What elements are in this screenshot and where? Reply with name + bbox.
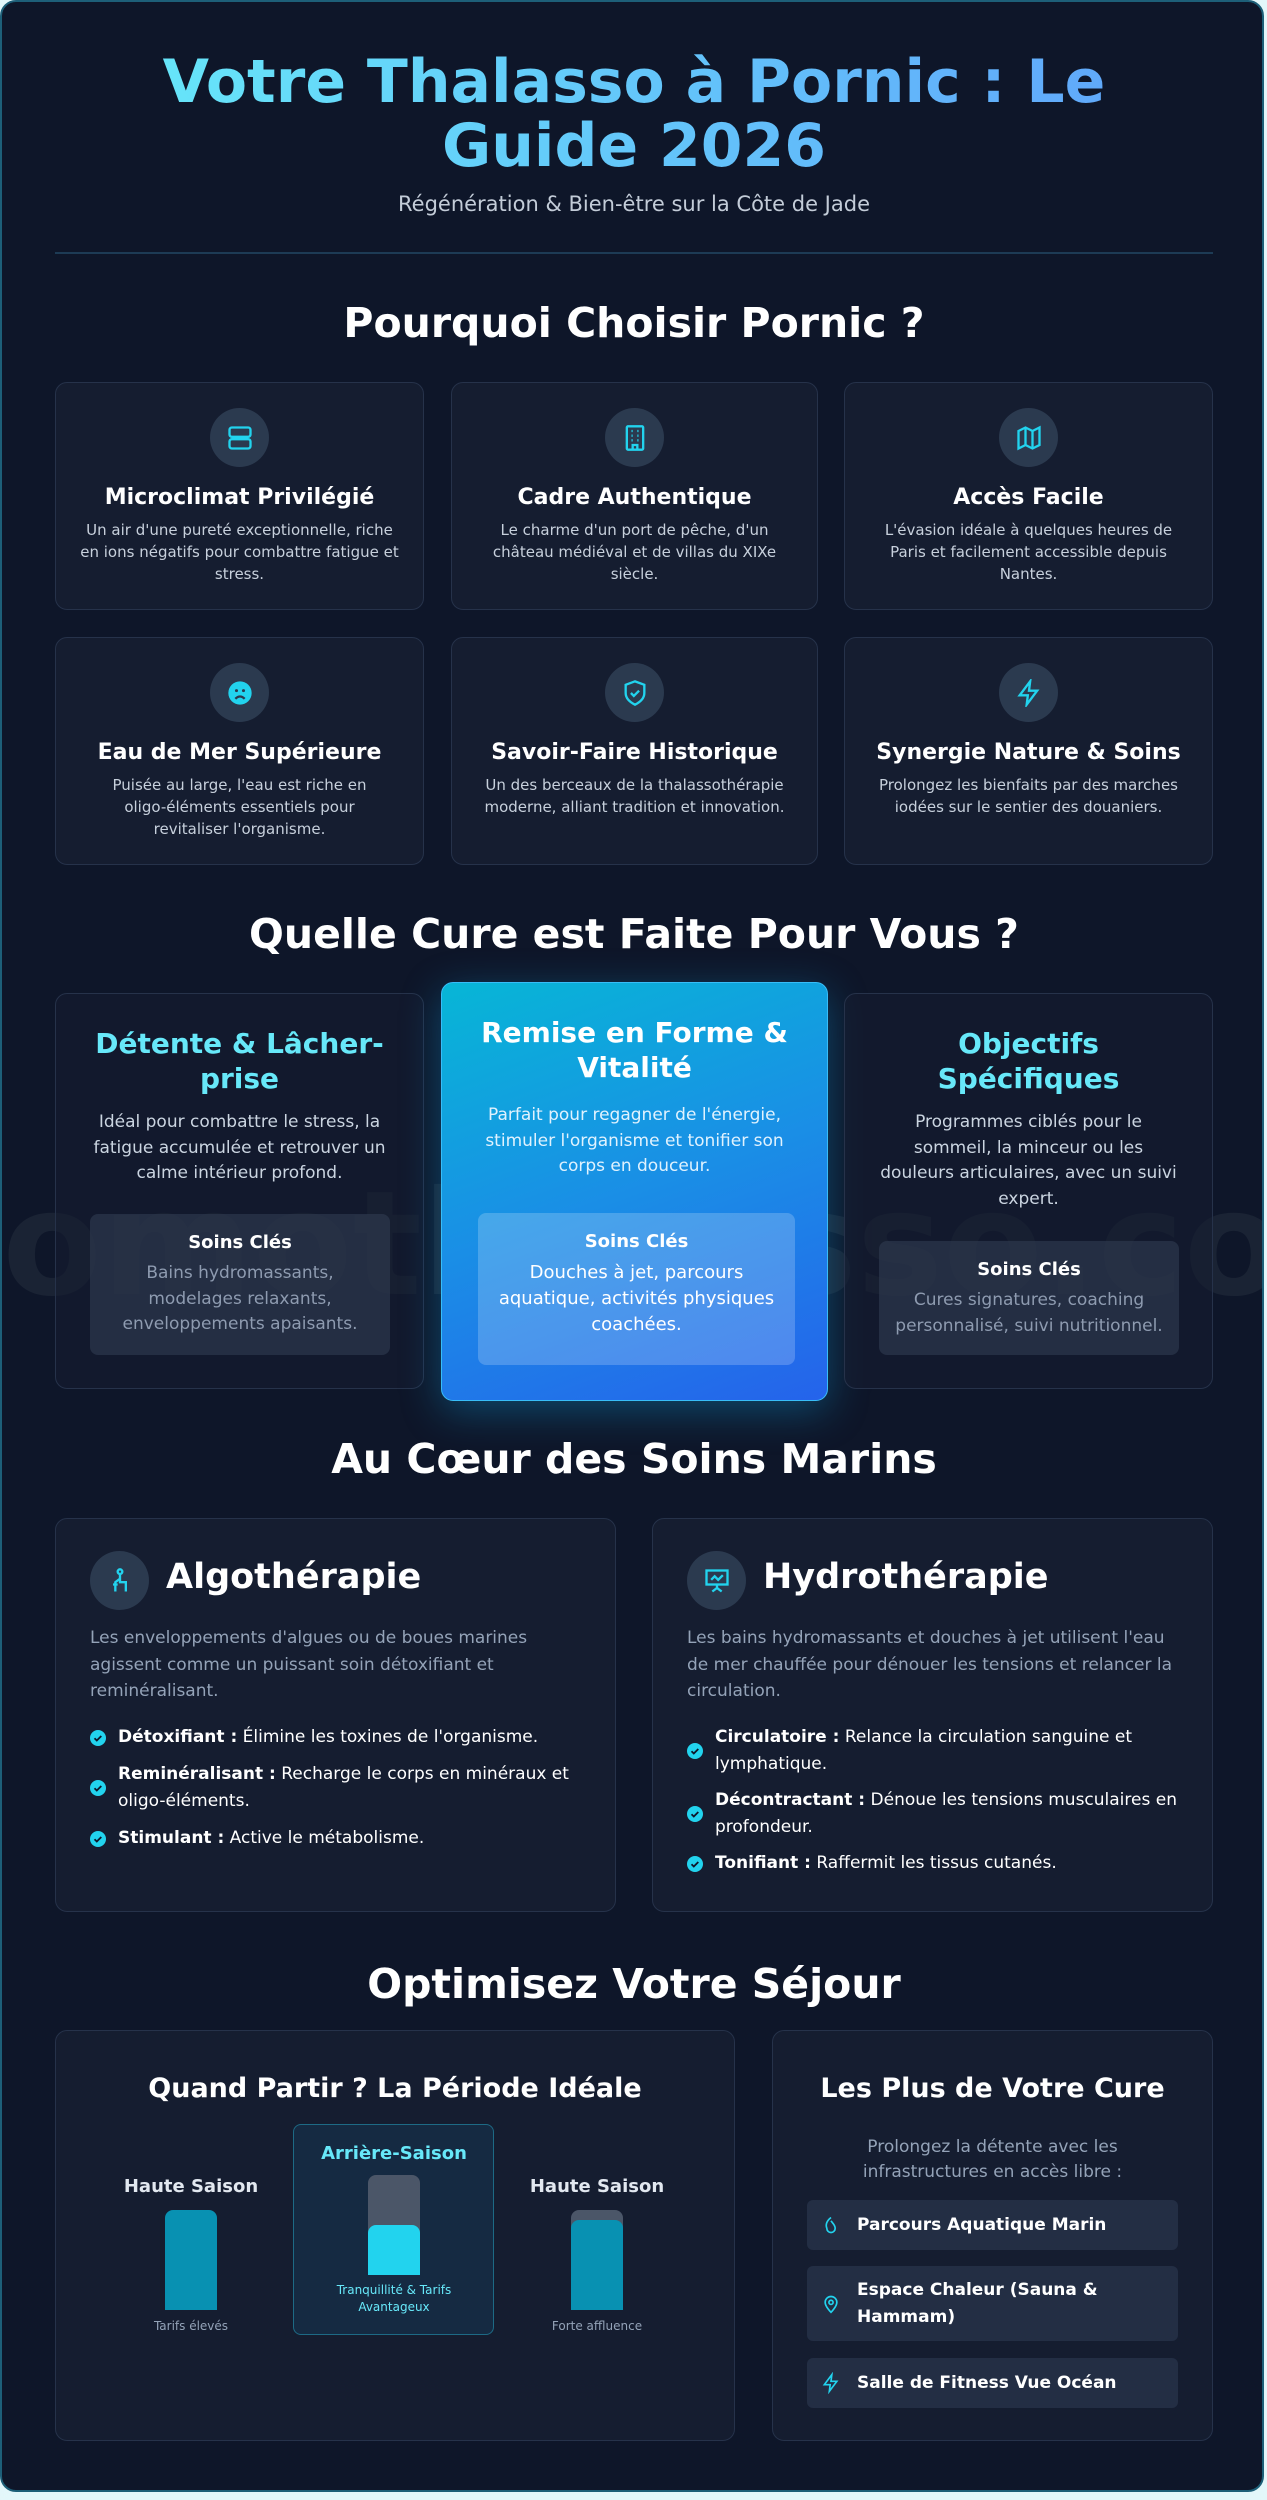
card: acces: Accès Facile xyxy=(953,485,1104,510)
panel: hydrotherapie: Les bains hydromassants et douches à jet utilisent l'eau de mer chauffée pour dénouer les tensions et relancer la circulation. xyxy=(687,1628,1172,1701)
card: microclimat: Un air d'une pureté exceptionnelle, riche en ions négatifs pour combattre fatigue et stress. xyxy=(80,521,399,583)
panel: les plus: Prolongez la détente avec les infrastructures en accès libre : xyxy=(863,2137,1122,2182)
soins cles box: Soins Clés xyxy=(188,1232,292,1253)
icon: map xyxy=(999,408,1058,467)
icon: chart board xyxy=(687,1551,746,1610)
bullet list: Stimulant : Active le métabolisme. xyxy=(118,1828,424,1848)
panel: les plus: Les Plus de Votre Cure xyxy=(820,2073,1165,2104)
panel: hydrotherapie xyxy=(652,1518,1213,1912)
cure card: detente xyxy=(55,993,424,1389)
item: fitness xyxy=(807,2358,1178,2408)
bar: arriere saison highlighted: Tranquillité & Tarifs xyxy=(337,2283,451,2297)
bar: arriere saison highlighted: Avantageux xyxy=(358,2300,430,2314)
cure card: detente: Détente & Lâcher-prise xyxy=(95,1027,384,1095)
panel: quand partir xyxy=(55,2030,735,2441)
card: cadre: Cadre Authentique xyxy=(517,485,752,510)
bar: arriere saison highlighted: Arrière-Saison xyxy=(321,2143,467,2164)
heading: soins marins: Au Cœur des Soins Marins xyxy=(331,1435,937,1483)
soins cles box: Cures signatures, coaching personnalisé, suivi nutritionnel. xyxy=(895,1290,1163,1336)
bar: haute saison 2 xyxy=(530,2176,664,2333)
card: eau de mer xyxy=(55,637,424,865)
heading: quelle cure: Quelle Cure est Faite Pour Vous ? xyxy=(249,910,1019,958)
bar: haute saison 1: Tarifs élevés xyxy=(154,2319,228,2333)
card: eau de mer: Puisée au large, l'eau est riche en oligo-éléments essentiels pour revitaliser l'organisme. xyxy=(112,776,366,838)
panel: algotherapie: Algothérapie xyxy=(166,1557,421,1597)
cure card: objectifs xyxy=(844,993,1213,1389)
card: savoir-faire: Savoir-Faire Historique xyxy=(491,740,778,765)
title: Votre Thalasso à Pornic : Le Guide 2026 xyxy=(163,47,1105,181)
soins cles box xyxy=(879,1241,1179,1355)
soins cles box: Douches à jet, parcours aquatique, activités physiques coachées. xyxy=(499,1262,774,1335)
icon: building xyxy=(605,408,664,467)
bar chart: saisons xyxy=(124,2124,664,2335)
item: espace chaleur: Hammam) xyxy=(857,2306,955,2326)
card: cadre: Le charme d'un port de pêche, d'un château médiéval et de villas du XIXe siècle. xyxy=(493,521,776,583)
bar: haute saison 1: Haute Saison xyxy=(124,2176,258,2197)
bar: haute saison 1 xyxy=(124,2176,258,2333)
cure card: remise en forme (highlight) xyxy=(441,982,828,1401)
item: espace chaleur xyxy=(807,2266,1178,2341)
bullet list: Détoxifiant : Élimine les toxines de l'organisme. xyxy=(118,1727,538,1747)
panel: algotherapie xyxy=(55,1518,616,1912)
heading: optimisez: Optimisez Votre Séjour xyxy=(367,1960,901,2008)
bar: haute saison 2: Haute Saison xyxy=(530,2176,664,2197)
soins cles box: Bains hydromassants, modelages relaxants, enveloppements apaisants. xyxy=(123,1263,357,1334)
icon: person xyxy=(90,1551,149,1610)
card: synergie xyxy=(844,637,1213,865)
item: parcours aquatique: Parcours Aquatique Marin xyxy=(857,2214,1106,2234)
bullet list xyxy=(90,1726,569,1848)
panel: quand partir: Quand Partir ? La Période Idéale xyxy=(148,2073,642,2104)
bullet list: Tonifiant : Raffermit les tissus cutanés. xyxy=(715,1853,1057,1873)
bullet list xyxy=(687,1727,1177,1873)
item: parcours aquatique xyxy=(807,2200,1178,2250)
card: eau de mer: Eau de Mer Supérieure xyxy=(98,740,381,765)
card: savoir-faire: Un des berceaux de la thalassothérapie moderne, alliant tradition et innovation. xyxy=(484,776,784,816)
bar: arriere saison highlighted xyxy=(293,2124,494,2335)
subtitle: Régénération & Bien-être sur la Côte de Jade xyxy=(398,192,870,216)
bullet list: Reminéralisant : Recharge le corps en minéraux et oligo-éléments. xyxy=(118,1764,569,1811)
bar: haute saison 2: Forte affluence xyxy=(552,2319,642,2333)
panel: hydrotherapie: Hydrothérapie xyxy=(763,1557,1049,1597)
cure card: remise en forme (highlight): Parfait pour regagner de l'énergie, stimuler l'organisme et tonifier son corps en douceur. xyxy=(485,1105,784,1176)
heading: pourquoi: Pourquoi Choisir Pornic ? xyxy=(343,299,925,347)
card: acces: L'évasion idéale à quelques heures de Paris et facilement accessible depuis Nantes. xyxy=(885,521,1172,583)
cure card: objectifs: Programmes ciblés pour le sommeil, la minceur ou les douleurs articulaires, avec un suivi expert. xyxy=(880,1112,1177,1208)
item: espace chaleur: Espace Chaleur (Sauna & xyxy=(857,2280,1098,2300)
bullet list: Décontractant : Dénoue les tensions musculaires en profondeur. xyxy=(715,1790,1177,1837)
bullet list: Circulatoire : Relance la circulation sanguine et lymphatique. xyxy=(715,1727,1132,1774)
soins cles box xyxy=(90,1214,390,1355)
card: microclimat xyxy=(55,382,424,610)
card: synergie: Synergie Nature & Soins xyxy=(876,740,1181,765)
icon: face xyxy=(210,663,269,722)
panel: algotherapie: Les enveloppements d'algues ou de boues marines agissent comme un puissant soin détoxifiant et reminéralisant. xyxy=(90,1628,527,1701)
icon: server xyxy=(210,408,269,467)
soins cles box xyxy=(478,1213,795,1365)
icon: shield xyxy=(605,663,664,722)
cure card: remise en forme (highlight): Remise en Forme & Vitalité xyxy=(481,1016,788,1084)
card: microclimat: Microclimat Privilégié xyxy=(105,485,374,510)
cure card: detente: Idéal pour combattre le stress, la fatigue accumulée et retrouver un calme intérieur profond. xyxy=(93,1112,386,1183)
panel: les plus xyxy=(772,2030,1213,2441)
card: savoir-faire xyxy=(451,637,818,865)
card: synergie: Prolongez les bienfaits par des marches iodées sur le sentier des douaniers. xyxy=(879,776,1178,816)
card: cadre xyxy=(451,382,818,610)
soins cles box: Soins Clés xyxy=(977,1259,1081,1280)
item: fitness: Salle de Fitness Vue Océan xyxy=(857,2372,1117,2392)
cure card: objectifs: Objectifs Spécifiques xyxy=(938,1027,1119,1095)
card: acces xyxy=(844,382,1213,610)
soins cles box: Soins Clés xyxy=(585,1231,688,1252)
icon: bolt xyxy=(999,663,1058,722)
